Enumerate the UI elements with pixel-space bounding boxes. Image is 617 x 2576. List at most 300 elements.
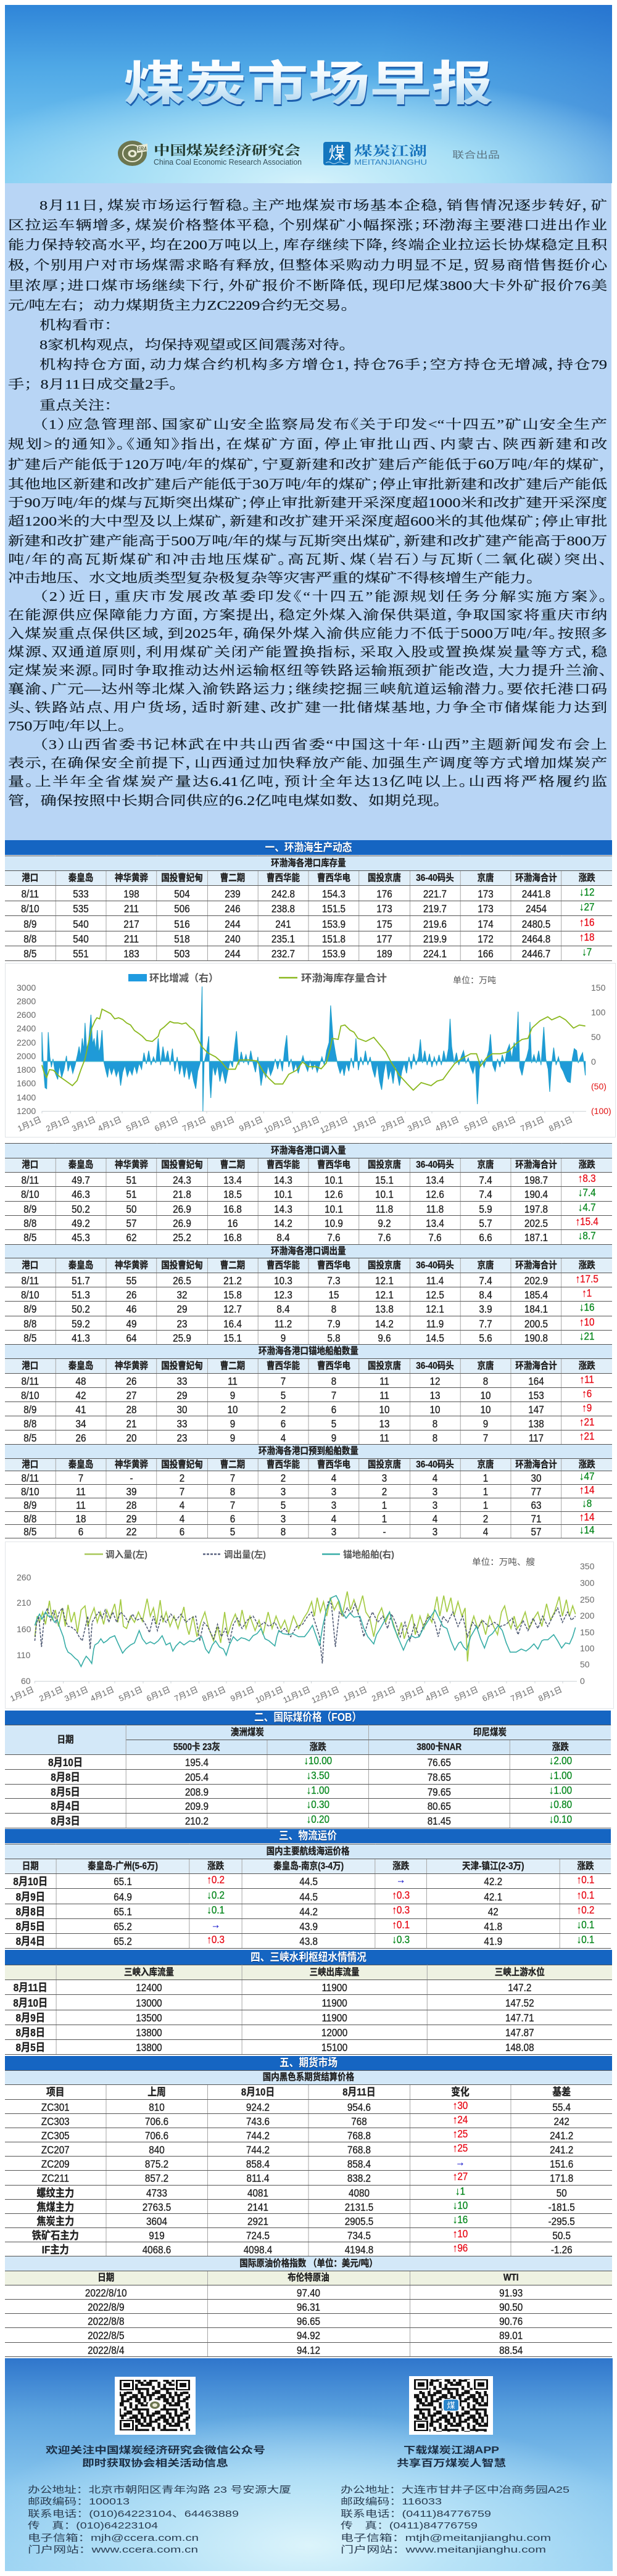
table: port inventory — [5, 856, 612, 961]
Meitanjianghu app call to action: 共享百万煤炭人智慧 — [397, 2457, 507, 2469]
table: FOB prices: 涨跌 — [310, 1742, 326, 1752]
table: vessels expected: 国投京唐 — [368, 1459, 401, 1470]
table: vessels expected: 57 — [531, 1525, 541, 1538]
table: port inventory: 2454 — [526, 902, 547, 915]
table: anchored vessels: 26 — [126, 1375, 136, 1387]
table: Three Gorges flows and level: 8月9日 — [16, 2012, 45, 2024]
table: domestic ferrous futures: 768.8 — [347, 2144, 371, 2156]
table: anchored vessels: 6 — [331, 1403, 336, 1416]
table: port outflow: 8/8 — [23, 1318, 36, 1330]
left axis labels: 2600 — [17, 1010, 36, 1020]
table: Three Gorges flows and level: 11900 — [321, 1997, 347, 2009]
table: anchored vessels: 涨跌 — [579, 1361, 595, 1371]
table: FOB prices: 78.65 — [428, 1771, 451, 1783]
table: port outflow: 13.8 — [375, 1303, 394, 1315]
CCERA WeChat call to action — [46, 2444, 265, 2469]
table: vessels expected: 8/5 — [23, 1525, 36, 1538]
panel: market commentary text: 定煤炭来源。同时争取推动达州运输枢纽等铁路运输瓶颈扩能改造，大力提升兰渝、 — [8, 663, 607, 678]
line: Bohai inventory total — [42, 1009, 586, 1090]
table: domestic ferrous futures: 858.4 — [347, 2158, 371, 2170]
table: anchored vessels: 8 — [433, 1432, 437, 1444]
table: vessels expected: 1 — [382, 1499, 387, 1511]
panel: market commentary text: 机构持仓方面，动力煤合约机构多方增仓1，持仓76手；空方持仓无增减，持仓79 — [39, 357, 607, 372]
panel: section 2 international coal prices — [5, 1711, 611, 1828]
table: vessels expected: 29 — [126, 1513, 136, 1525]
table: anchored vessels: 5 — [281, 1389, 286, 1402]
x axis month labels: 8月1日 — [547, 1115, 574, 1133]
table: coastal freight rates: 日期 — [22, 1861, 39, 1872]
CCERA contact details: 电子信箱：mjh@ccera.com.cn — [28, 2533, 199, 2543]
legend: daily change bar: 环比增减（右） — [149, 973, 218, 984]
table: port outflow: 51.3 — [72, 1289, 90, 1301]
table: anchored vessels: 8/9 — [23, 1403, 36, 1416]
table: port inflow: 13.4 — [223, 1174, 242, 1186]
table: vessels expected: - — [130, 1472, 133, 1484]
table: coastal freight rates: 65.1 — [114, 1875, 132, 1888]
table: anchored vessels: 7 — [331, 1389, 336, 1402]
table: port outflow: 12.1 — [375, 1274, 394, 1287]
table: port outflow: 7.4 — [479, 1274, 492, 1287]
table: port inflow: 51 — [126, 1174, 136, 1186]
icon: CCERA WeChat QR code — [115, 2377, 196, 2435]
table: anchored vessels: 33 — [177, 1375, 187, 1387]
section heading 5 — [5, 2056, 612, 2070]
table: port inflow: 24.3 — [173, 1174, 191, 1186]
table: port outflow: 55 — [126, 1274, 136, 1287]
table: FOB prices: 日期 — [57, 1735, 73, 1745]
panel: market commentary text: 手；8月11日成交量2手。 — [8, 377, 186, 392]
table: port inflow: 京唐 — [477, 1160, 494, 1170]
table: FOB prices: 澳洲煤炭 — [231, 1727, 264, 1738]
table: port inventory: 2464.8 — [522, 933, 550, 945]
table: anchored vessels: 9 — [331, 1432, 336, 1444]
table: port inventory: 518 — [174, 933, 190, 945]
x axis month labels: 1月1日 — [16, 1115, 43, 1133]
table: port inventory: 175 — [376, 918, 392, 930]
table: anchored vessels: 曹西华能 — [267, 1361, 300, 1371]
legend: anchored vessels: 锚地船舶(右) — [343, 1549, 394, 1560]
icon: Meitanjianghu app QR code — [409, 2376, 493, 2435]
table: coastal freight rates: 涨跌 — [392, 1861, 409, 1872]
table: port outflow: 8 — [331, 1303, 336, 1315]
table: coastal freight rates: 43.8 — [299, 1935, 318, 1947]
table: domestic ferrous futures: 768.8 — [347, 2129, 371, 2142]
table: anchored vessels: 曹二期 — [220, 1361, 245, 1371]
table: domestic ferrous futures: 50.5 — [552, 2229, 571, 2242]
table: crude oil index: 2022/8/4 — [88, 2344, 124, 2356]
table: vessels expected: 1 — [483, 1485, 488, 1498]
x axis month labels: 5月1日 — [453, 1685, 479, 1703]
table: FOB prices: 8月4日 — [51, 1800, 80, 1812]
table: domestic ferrous futures: 焦炭主力 — [36, 2215, 74, 2227]
panel: market commentary text: 冲击地压、水文地质类型复杂极复杂等灾害严重的煤矿不得核增生产能力。 — [8, 571, 542, 585]
table: anchored vessels: 7 — [281, 1375, 286, 1387]
table: crude oil index: 97.40 — [297, 2287, 320, 2299]
right axis labels: 150 — [591, 983, 606, 993]
table: Three Gorges flows and level: 147.87 — [505, 2026, 534, 2039]
table: coastal freight rates: ↑0.1 — [577, 1889, 594, 1901]
paragraph: Chongqing energy plan — [8, 589, 607, 733]
section heading 5: 五、期货市场 — [280, 2057, 337, 2069]
table: coastal freight rates: ↑0.3 — [207, 1933, 225, 1946]
left axis labels: 1600 — [17, 1078, 36, 1088]
right axis labels — [580, 1561, 595, 1686]
table: anchored vessels: 36-40码头 — [416, 1361, 454, 1371]
panel: market commentary text: 量。上半年全省煤炭产量达6.41亿吨，预计全年达13亿吨以上。山西将严格履约监 — [8, 774, 607, 789]
CCERA contact details: 办公地址：北京市朝阳区青年沟路 23 号安源大厦 — [28, 2485, 291, 2495]
table: port inflow: 190.4 — [524, 1188, 548, 1200]
table: port inflow: 49.2 — [72, 1217, 90, 1229]
table: port outflow: 32 — [177, 1289, 187, 1301]
table: Three Gorges flows and level: 12000 — [321, 2026, 347, 2039]
left axis labels: 2400 — [17, 1023, 36, 1033]
table: port inflow: 26.9 — [173, 1203, 191, 1215]
panel: market commentary text: 规划>的通知》。《通知》指出，在煤矿方面，停止审批山西、内蒙古、陕西新建和改 — [8, 437, 607, 452]
left axis labels: 1200 — [17, 1106, 36, 1116]
bars: daily change series — [42, 986, 586, 1112]
Meitanjianghu English name: MEITANJIANGHU — [354, 158, 427, 167]
panel: market commentary text: 里浓厚；进口煤市场继续下行，外矿报价不断降低，现印尼煤3800大卡外矿报价76美 — [8, 278, 607, 293]
table: port inflow: 202.5 — [524, 1217, 548, 1229]
table: vessels expected: 3 — [281, 1513, 286, 1525]
CCERA contact details — [28, 2485, 291, 2555]
table: port inventory: 516 — [174, 918, 190, 930]
right axis labels: 0 — [580, 1676, 585, 1686]
table: coastal freight rates: ↑0.1 — [392, 1918, 410, 1931]
table: port inflow: 13.4 — [426, 1174, 444, 1186]
table: domestic ferrous futures: 171.8 — [550, 2172, 573, 2184]
legend: outflow: 调出量(左) — [224, 1550, 266, 1560]
table: crude oil index: 94.92 — [297, 2329, 320, 2342]
x axis month labels: 12月1日 — [310, 1685, 341, 1705]
table: FOB prices: 8月10日 — [48, 1756, 83, 1769]
table: crude oil index: 布伦特原油 — [288, 2273, 329, 2283]
table: port inflow: 18.5 — [223, 1188, 242, 1200]
table: vessels expected: 77 — [531, 1485, 541, 1498]
table: port outflow: 7.3 — [327, 1274, 341, 1287]
table: port inflow: 46.3 — [72, 1188, 90, 1200]
table: port outflow: 41.3 — [72, 1332, 90, 1344]
table: anchored vessels: 9 — [230, 1389, 235, 1402]
table: domestic ferrous futures: 50 — [557, 2187, 567, 2199]
table: port outflow: 曹西华电 — [317, 1260, 350, 1271]
CCERA English name: China Coal Economic Research Association — [154, 158, 302, 167]
icon: Meitanjianghu app QR code: 煤 — [447, 2401, 455, 2410]
table: vessels expected: 5 — [281, 1499, 286, 1511]
table: domestic ferrous futures: -181.5 — [549, 2201, 575, 2213]
table: vessels expected: 3 — [331, 1499, 336, 1511]
table: vessels expected: 3 — [331, 1485, 336, 1498]
table: domestic ferrous futures: 铁矿石主力 — [32, 2229, 79, 2242]
table: domestic ferrous futures: 857.2 — [145, 2172, 168, 2184]
title — [123, 56, 493, 104]
right axis labels: 0 — [591, 1057, 596, 1067]
table: port inventory: 153.9 — [322, 918, 346, 930]
table: domestic ferrous futures: 上周 — [147, 2086, 166, 2098]
table: port inventory: 241 — [275, 918, 291, 930]
table: domestic ferrous futures: ZC305 — [41, 2129, 70, 2142]
table: anchored vessels: 国投京唐 — [368, 1361, 401, 1371]
table: port inventory: 235.1 — [271, 933, 295, 945]
table: port inventory: ↓7 — [582, 946, 592, 958]
table: port outflow: 15 — [329, 1289, 339, 1301]
table: port inflow: 49.7 — [72, 1174, 90, 1186]
table: port inflow: 36-40码头 — [416, 1160, 454, 1170]
table: port inflow: 21.8 — [173, 1188, 191, 1200]
x axis month labels: 3月1日 — [63, 1685, 89, 1703]
table: coastal freight rates: ↑0.2 — [207, 1874, 225, 1886]
table: port inventory: 曹西华能 — [267, 873, 300, 883]
x axis month labels: 3月1日 — [399, 1685, 425, 1703]
table: port outflow: 12.7 — [223, 1303, 242, 1315]
table: port inflow: 7.6 — [378, 1231, 391, 1244]
line: outflow series — [35, 1602, 576, 1664]
table: port inventory: ↑18 — [579, 931, 594, 943]
CCERA contact details: 传 真：(010)64223104 — [28, 2520, 158, 2531]
left axis labels — [17, 983, 36, 1116]
table: coastal freight rates: 42.1 — [484, 1891, 502, 1903]
table: anchored vessels: 10 — [228, 1403, 238, 1416]
table: domestic ferrous futures: ZC211 — [41, 2172, 69, 2184]
table: domestic ferrous futures: 焦煤主力 — [36, 2201, 74, 2213]
table: domestic ferrous futures: 2921 — [247, 2215, 268, 2227]
table: vessels expected: 7 — [180, 1485, 184, 1498]
table: FOB prices: ↓3.50 — [307, 1769, 329, 1781]
table: port outflow: 190.8 — [524, 1332, 548, 1344]
table: port inventory: 239 — [225, 888, 241, 900]
table: port inflow: 14.3 — [274, 1203, 292, 1215]
table: port inflow: 8/11 — [22, 1174, 39, 1186]
table: port inventory: 535 — [73, 902, 89, 915]
table: port inflow: 25.2 — [173, 1231, 191, 1244]
table: domestic ferrous futures: ZC207 — [41, 2144, 70, 2156]
x axis month labels — [9, 1685, 563, 1705]
table: port outflow: 200.5 — [524, 1318, 548, 1330]
table: port outflow: 21.2 — [223, 1274, 242, 1287]
table: port inventory: 540 — [73, 918, 89, 930]
panel: market commentary text: 新建和改扩建产能高于500万吨/年的煤与瓦斯突出煤矿，新建和改扩建产能高于800万 — [8, 534, 607, 548]
x axis month labels: 9月1日 — [238, 1115, 264, 1133]
table: domestic ferrous futures: 743.6 — [246, 2115, 270, 2128]
table: port outflow: 202.9 — [524, 1274, 548, 1287]
table: port inventory: 环渤海合计 — [515, 873, 557, 883]
table: anchored vessels: 11 — [379, 1432, 389, 1444]
table: vessels expected: 港口 — [22, 1459, 38, 1470]
table: vessels expected: 3 — [382, 1472, 387, 1484]
x axis month labels: 6月1日 — [145, 1685, 172, 1703]
table: port inflow: ↓7.4 — [578, 1187, 596, 1199]
table: domestic ferrous futures: IF主力 — [42, 2244, 69, 2256]
paragraph: institutional view — [8, 318, 607, 392]
table: vessels expected: 30 — [531, 1472, 541, 1484]
CCERA contact details: 门户网站：www.ccera.com.cn — [28, 2545, 198, 2555]
table: port outflow: 7.9 — [327, 1318, 341, 1330]
table: port outflow: 59.2 — [72, 1318, 90, 1330]
table: port inflow: 50 — [126, 1203, 136, 1215]
table: port outflow: 环渤海合计 — [515, 1260, 557, 1271]
panel: market commentary text — [5, 183, 611, 840]
table: anchored vessels: 8/10 — [21, 1389, 39, 1402]
x axis month labels: 4月1日 — [89, 1685, 115, 1703]
table: vessels expected: 8/11 — [22, 1472, 39, 1484]
table: anchored vessels: 曹西华电 — [317, 1361, 350, 1371]
table: port outflow: 5.8 — [327, 1332, 341, 1344]
table: vessels expected: 环渤海合计 — [515, 1459, 557, 1470]
table: port inventory: 217 — [123, 918, 139, 930]
table: domestic ferrous futures: 3604 — [146, 2215, 167, 2227]
table: domestic ferrous futures: 706.6 — [145, 2115, 168, 2128]
table: port outflow: 10.3 — [274, 1274, 292, 1287]
table: port outflow: 49 — [126, 1318, 136, 1330]
table: anchored vessels: 11 — [379, 1389, 389, 1402]
table: Three Gorges flows and level: 三峡出库流量 — [310, 1967, 360, 1978]
table: domestic ferrous futures: -295.5 — [549, 2215, 575, 2227]
table: port outflow: 8/9 — [23, 1303, 36, 1315]
table: crude oil index: 88.54 — [499, 2344, 523, 2356]
table: vessels expected: 11 — [76, 1499, 86, 1511]
x axis month labels: 4月1日 — [434, 1115, 460, 1133]
table: port inflow: 国投京唐 — [368, 1160, 401, 1170]
table: port inflow: 45.3 — [72, 1231, 90, 1244]
CCERA contact details: 联系电话：(010)64223104、64463889 — [28, 2509, 239, 2519]
table: anchored vessels: 10 — [430, 1403, 440, 1416]
x axis month labels: 1月1日 — [9, 1685, 35, 1703]
table: port inflow: 7.6 — [428, 1231, 442, 1244]
Meitanjianghu contact details: 电子信箱：mtjh@meitanjianghu.com — [341, 2533, 551, 2543]
table: port inflow: 曹西华电 — [317, 1160, 350, 1170]
table: anchored vessels: 神华黄骅 — [115, 1361, 148, 1371]
table: port inventory: 219.7 — [423, 902, 447, 915]
right axis labels: 50 — [580, 1659, 590, 1669]
table: port outflow: 11.2 — [275, 1318, 292, 1330]
table: port inflow: 197.8 — [524, 1203, 548, 1215]
right axis labels: 100 — [580, 1643, 595, 1653]
Meitanjianghu Chinese name: 煤炭江湖 — [354, 144, 427, 159]
table: port inventory: 8/9 — [23, 918, 36, 930]
table: FOB prices: 8月5日 — [51, 1786, 80, 1798]
table: port inventory: 242.8 — [271, 888, 295, 900]
table: FOB prices: 205.4 — [185, 1771, 209, 1783]
CCERA contact details: 邮政编码：100013 — [28, 2496, 130, 2507]
x axis month labels: 5月1日 — [125, 1115, 151, 1133]
x axis month labels: 7月1日 — [509, 1685, 536, 1703]
table: FOB prices: ↓0.20 — [307, 1814, 329, 1825]
table: domestic ferrous futures: 4733 — [146, 2187, 167, 2199]
table: vessels expected: 28 — [126, 1499, 136, 1511]
section heading 1: 一、环渤海生产动态 — [265, 841, 352, 854]
panel: market commentary text: 吨/年的高瓦斯煤矿和冲击地压煤矿。高瓦斯、煤（岩石）与瓦斯（二氧化碳）突出、 — [8, 552, 607, 567]
table: port inventory: 港口 — [22, 873, 38, 883]
table: FOB prices: ↓1.00 — [549, 1769, 572, 1781]
table: domestic ferrous futures: 2905.5 — [345, 2215, 373, 2227]
table: domestic ferrous futures: ZC301 — [41, 2101, 70, 2113]
table: port inventory: 232.7 — [271, 947, 295, 960]
table: port outflow: 曹二期 — [220, 1260, 245, 1271]
paragraph: market overview — [8, 198, 607, 313]
left axis labels: 60 — [21, 1676, 31, 1686]
table: vessels expected: 8/10 — [21, 1485, 39, 1498]
panel: market commentary text: （1）应急管理部、国家矿山安全监察局发布《关于印发<“十四五”矿山安全生产 — [39, 417, 607, 432]
table: port inflow: 5.7 — [479, 1217, 492, 1229]
table: port inflow: 9.2 — [378, 1217, 391, 1229]
table: port inventory: 177 — [376, 933, 392, 945]
table: Three Gorges flows and level: 15100 — [321, 2041, 347, 2054]
table: vessels expected: 2 — [483, 1513, 488, 1525]
table: port inventory: ↓27 — [579, 901, 594, 913]
table: port inflow — [5, 1143, 612, 1245]
table: port outflow — [5, 1244, 612, 1345]
table: vessels expected: 3 — [331, 1525, 336, 1538]
table: vessels expected: 3 — [281, 1485, 286, 1498]
table: vessels expected: 8/9 — [23, 1499, 36, 1511]
table: port inflow: 8.4 — [276, 1231, 290, 1244]
left axis labels: 1800 — [17, 1065, 36, 1075]
table: anchored vessels: 42 — [76, 1389, 86, 1402]
right axis labels: 150 — [580, 1627, 595, 1637]
table: coastal freight rates: 41.9 — [484, 1935, 502, 1947]
table: FOB prices: ↓0.30 — [307, 1799, 329, 1810]
table: port inflow: 12.6 — [325, 1188, 343, 1200]
table: port inventory: 173 — [376, 902, 392, 915]
table: coastal freight rates: 44.5 — [299, 1891, 318, 1903]
table: anchored vessels: 29 — [177, 1389, 187, 1402]
table: vessels expected: 4 — [180, 1513, 184, 1525]
table: port outflow: 8/5 — [23, 1332, 36, 1344]
table: port outflow: 26.5 — [173, 1274, 191, 1287]
table: coastal freight rates: 44.5 — [299, 1875, 318, 1888]
table: port inventory: 151.5 — [322, 902, 346, 915]
table: vessels expected: 8 — [230, 1485, 235, 1498]
table: crude oil index: 2022/8/9 — [88, 2301, 124, 2313]
table: Three Gorges flows and level — [5, 1965, 612, 2055]
joint publication label: 联合出品 — [452, 150, 500, 160]
panel: market commentary text: 能力保持较高水平，均在200万吨以上，库存继续下降，终端企业拉运长协煤稳定且积 — [8, 237, 607, 252]
table: coastal freight rates: ↓0.3 — [392, 1933, 410, 1946]
table: anchored vessels: 20 — [126, 1432, 136, 1444]
panel: market commentary text: 扩建后产能低于120万吨/年的煤矿，宁夏新建和改扩建后产能低于60万吨/年的煤矿， — [8, 457, 607, 472]
table: vessels expected: 7 — [230, 1499, 235, 1511]
table: port inflow: 15.1 — [375, 1174, 394, 1186]
table: anchored vessels: 48 — [76, 1375, 86, 1387]
table: port inventory: ↓12 — [579, 886, 594, 898]
table: FOB prices — [5, 1725, 611, 1828]
table: domestic ferrous futures: -1.26 — [551, 2244, 573, 2256]
table: domestic ferrous futures — [5, 2070, 612, 2256]
panel: market commentary text: 入煤炭重点保供区域，到2025年，确保外煤入渝供应能力不低于5000万吨/年。按照多 — [8, 626, 607, 641]
table: vessels expected: 6 — [78, 1525, 83, 1538]
table: domestic ferrous futures: 151.6 — [550, 2158, 573, 2170]
x axis month labels: 10月1日 — [254, 1685, 284, 1705]
right axis labels: 300 — [580, 1578, 595, 1588]
table: port inventory: 曹二期 — [220, 873, 245, 883]
right axis labels: 350 — [580, 1561, 595, 1571]
panel: section 5 futures market — [5, 2056, 612, 2357]
table: port inventory: 8/11 — [22, 888, 39, 900]
x axis month labels: 3月1日 — [70, 1115, 97, 1133]
Meitanjianghu app call to action — [397, 2444, 507, 2469]
panel: market commentary text: 区拉运车辆增多，煤炭价格整体平稳，个别煤矿小幅探涨；环渤海主要港口进出作业 — [8, 218, 607, 233]
table: crude oil index: 日期 — [97, 2273, 114, 2283]
table: crude oil index: WTI — [503, 2273, 519, 2283]
table: port inflow: 8/8 — [23, 1217, 36, 1229]
table: anchored vessels: 2 — [281, 1403, 286, 1416]
table: port inflow: 5.9 — [479, 1203, 492, 1215]
table: port inventory: 36-40码头 — [416, 873, 454, 883]
table: vessels expected: 环渤海各港口预到船舶数量 — [259, 1446, 358, 1456]
table: anchored vessels: 港口 — [22, 1361, 38, 1371]
table: coastal freight rates: 64.9 — [114, 1891, 132, 1903]
table: vessels expected: 2 — [281, 1472, 286, 1484]
